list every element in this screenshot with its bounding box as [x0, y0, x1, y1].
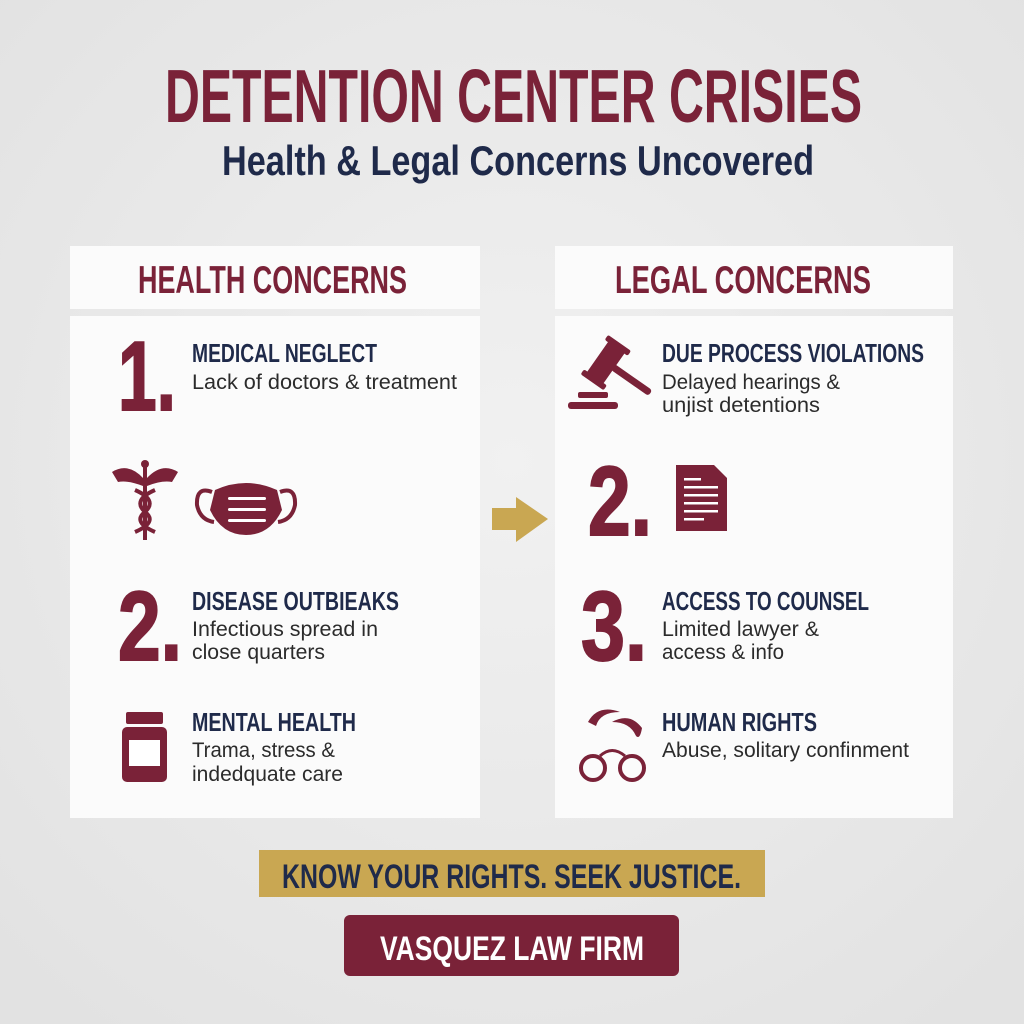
item: document — [588, 446, 727, 556]
item: due process violations: DUE PROCESS VIOLATIONS — [662, 338, 924, 368]
heading: health concerns: HEALTH CONCERNS — [138, 259, 407, 302]
item: disease outbreaks: 2. — [118, 571, 182, 681]
item: medical neglect: MEDICAL NEGLECT — [192, 338, 377, 368]
icon: medicine jar — [122, 712, 167, 782]
button: law firm — [344, 915, 679, 976]
item: mental health: MENTAL HEALTH — [192, 707, 356, 737]
icon: caduceus — [112, 460, 178, 540]
item: disease outbreaks: DISEASE OUTBIEAKS — [192, 586, 399, 616]
icon: gavel — [568, 335, 664, 413]
item: mental health — [192, 707, 356, 786]
subtitle: Health & Legal Concerns Uncovered — [222, 137, 814, 184]
item: access to counsel: ACCESS TO COUNSEL — [662, 586, 869, 616]
item: mental health: Trama, stress & — [192, 739, 335, 762]
item: access to counsel: 3. — [581, 571, 647, 681]
item: due process violations: Delayed hearings & — [662, 371, 840, 394]
heading: legal concerns — [555, 246, 953, 309]
item: medical neglect: 1. — [118, 321, 176, 431]
item: due process violations: unjist detentions — [662, 394, 820, 417]
item: medical neglect: Lack of doctors & treatment — [192, 371, 457, 394]
item: human rights — [662, 707, 909, 762]
heading: legal concerns: LEGAL CONCERNS — [615, 259, 871, 302]
banner: know your rights — [259, 850, 765, 897]
icon: handcuffs — [581, 710, 644, 780]
item: disease outbreaks: Infectious spread in — [192, 618, 378, 641]
item: mental health: indedquate care — [192, 763, 343, 786]
banner: know your rights: KNOW YOUR RIGHTS. SEEK JUSTICE. — [282, 858, 741, 896]
item: access to counsel: access & info — [662, 641, 784, 664]
item: medical neglect — [118, 321, 457, 431]
icon: face mask — [197, 483, 295, 535]
arrow — [492, 497, 548, 542]
heading: health concerns — [70, 246, 480, 309]
item: document: 2. — [588, 446, 652, 556]
item: disease outbreaks: close quarters — [192, 641, 325, 664]
item: human rights: Abuse, solitary confinment — [662, 739, 909, 762]
item: access to counsel — [581, 571, 869, 681]
item: due process violations — [662, 338, 924, 417]
button: law firm: VASQUEZ LAW FIRM — [380, 930, 644, 968]
panel: legal concerns — [555, 246, 953, 818]
item: access to counsel: Limited lawyer & — [662, 618, 819, 641]
item: human rights: HUMAN RIGHTS — [662, 707, 817, 737]
item: disease outbreaks — [118, 571, 399, 681]
panel: health concerns — [70, 246, 480, 818]
